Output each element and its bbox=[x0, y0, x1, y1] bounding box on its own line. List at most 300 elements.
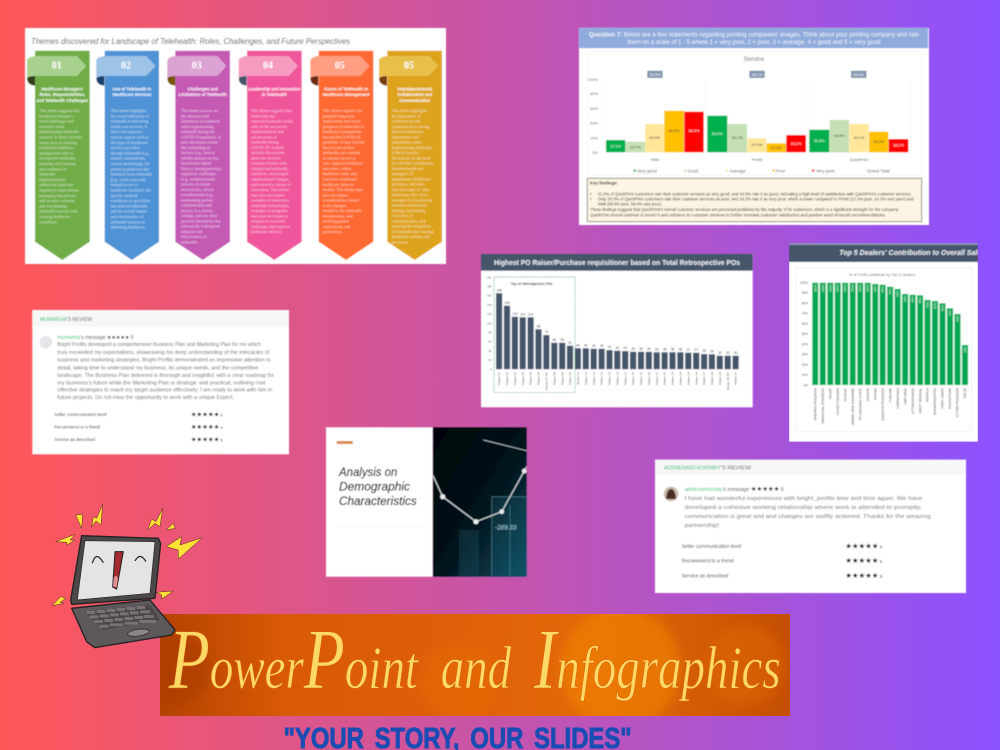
theme column 01: regulatory requirements, bbox=[39, 188, 80, 194]
theme column 04: strategies or programs bbox=[251, 208, 288, 213]
review body: future projects. Do not miss the opportunity to work with a unique Expert. bbox=[57, 395, 234, 401]
bar chart: retrospective POs: 30 bbox=[718, 351, 722, 355]
bar chart: profit share by dealer: 89% bbox=[903, 295, 907, 302]
heading: telehealth themes: Themes discovered for Landscape of Telehealth: Roles, Challenges, and Future Perspectives bbox=[31, 36, 351, 46]
rating rows: Recommend to a friend bbox=[54, 425, 100, 430]
bar chart: retrospective POs: Raiser 27 bbox=[702, 372, 706, 385]
theme column 01: faced challenges and bbox=[39, 119, 73, 124]
key findings box: Key findings: bbox=[590, 180, 618, 186]
bar chart: retrospective POs: 35 bbox=[702, 349, 706, 353]
theme column 05: healthcare delivery bbox=[323, 182, 355, 187]
bar chart: retrospective POs: Raiser 11 bbox=[576, 372, 580, 385]
theme column 02: benefited from telehealth bbox=[111, 172, 152, 177]
theme column 04: championed telehealth bbox=[251, 166, 288, 171]
bar chart: retrospective POs: 42 bbox=[616, 346, 619, 350]
bar chart: profit share by dealer: ANDHRA PRADESH bbox=[814, 388, 818, 420]
theme column 02: delivering healthcare. bbox=[111, 225, 146, 230]
reviewer line with rating: mumweha's message ★★★★★ 5 bbox=[57, 335, 134, 341]
slide title: Demographic bbox=[339, 480, 410, 494]
bar chart: retrospective POs: 115 bbox=[512, 312, 518, 316]
theme column 06: Collaboration and bbox=[397, 92, 433, 97]
theme column 06: stakeholders when bbox=[392, 140, 422, 144]
theme column 06: seamless information bbox=[392, 202, 427, 208]
theme column 02: limited access to bbox=[111, 182, 138, 187]
theme column 02: and effectiveness of bbox=[111, 214, 144, 219]
theme column 05: potential long-term bbox=[323, 113, 355, 118]
bar chart: retrospective POs: Raiser 13 bbox=[592, 372, 596, 385]
theme column 04: telehealth technologies, bbox=[251, 203, 290, 209]
panel: demographic analysis slide bbox=[326, 427, 527, 577]
theme column 05: outcomes, reduce bbox=[323, 166, 352, 172]
key findings box: • bbox=[590, 197, 592, 202]
bar chart: retrospective POs: Raiser 24 bbox=[678, 372, 682, 385]
theme column 01: This theme suggests that bbox=[39, 108, 81, 113]
theme column 01: telehealth services with bbox=[39, 209, 78, 214]
bar chart: service ratings: 100% bbox=[588, 77, 598, 82]
theme column 03: effectiveness of bbox=[181, 234, 207, 239]
theme column 06: strategies for facilitating bbox=[392, 197, 432, 202]
bar chart: retrospective POs: 39 bbox=[647, 347, 651, 351]
theme column 02: various aspects such as bbox=[111, 134, 149, 140]
rating rows: Service as described bbox=[682, 574, 728, 580]
bar chart: retrospective POs: 38 bbox=[671, 348, 674, 352]
bar chart: retrospective POs: Raiser 29 bbox=[718, 372, 722, 385]
theme column 04: about the need for bbox=[251, 155, 281, 160]
bar chart: retrospective POs: 60 bbox=[488, 340, 492, 344]
bar chart: service ratings: Good bbox=[688, 168, 699, 174]
bar chart: retrospective POs: Raiser 22 bbox=[663, 372, 667, 385]
theme column 05: infrastructure, and bbox=[323, 213, 353, 219]
bar chart: service ratings: 40.1% bbox=[732, 136, 743, 140]
theme column 04: organizational changes, bbox=[251, 177, 290, 183]
bar chart: retrospective POs: 120 bbox=[487, 312, 492, 316]
theme column 04: in Telehealth bbox=[262, 92, 287, 97]
theme column 04: COVID-19. It likely bbox=[251, 145, 285, 150]
theme column 05: transform traditional bbox=[323, 177, 357, 182]
bar chart: service ratings: 0% bbox=[592, 150, 598, 155]
bar chart: profit share by dealer: RAJASTHAN bbox=[948, 388, 952, 409]
panel: top dealers chart bbox=[789, 243, 985, 442]
bar chart: profit share by dealer: 100% bbox=[866, 284, 870, 292]
bar chart: retrospective POs: Raiser 08 bbox=[552, 372, 556, 385]
bar chart: profit share by dealer: 82% bbox=[933, 302, 937, 309]
theme column 03: setting), and any other bbox=[181, 213, 218, 219]
bar chart: service ratings: Poor bbox=[776, 168, 786, 174]
theme column 01: issues such as adapting bbox=[39, 140, 77, 145]
theme column 06: Communication bbox=[399, 98, 431, 103]
bar chart: retrospective POs: 140 bbox=[487, 303, 492, 307]
theme column 02: Healthcare Services bbox=[112, 92, 152, 97]
theme column 06: 05 bbox=[404, 60, 414, 72]
bar chart: profit share by dealer: TELANGANA STATE bbox=[858, 387, 862, 421]
review header bbox=[655, 460, 966, 475]
bar chart: retrospective POs: Raiser 18 bbox=[631, 372, 635, 385]
theme column 03 bbox=[167, 51, 230, 260]
panel: telehealth themes bbox=[25, 28, 446, 264]
bar chart: profit share by dealer: 100% bbox=[843, 284, 847, 292]
theme column 04: telehealth during bbox=[251, 140, 279, 145]
bar chart: service ratings bbox=[587, 52, 922, 175]
theme column 02: This theme highlights bbox=[111, 108, 147, 113]
theme column 01: healthcare managers bbox=[39, 113, 73, 118]
bar chart: service ratings: Very poor bbox=[816, 168, 835, 174]
theme column 02: healthcare facilities), the bbox=[111, 188, 151, 194]
theme column 01: existing healthcare bbox=[39, 214, 70, 219]
theme column 06: discussions on the need bbox=[392, 155, 430, 160]
theme column 03: barriers (e.g., lack of bbox=[181, 150, 216, 156]
bar chart: retrospective POs bbox=[487, 275, 739, 390]
theme column 05: 05 bbox=[335, 60, 345, 72]
bar chart: profit share by dealer: 0% bbox=[803, 383, 808, 387]
theme column 03: policies, licensure bbox=[181, 182, 211, 188]
bar chart: retrospective POs: Raiser 12 bbox=[584, 372, 588, 385]
bar chart: retrospective POs: 45 bbox=[592, 344, 596, 348]
theme column 06: between healthcare bbox=[392, 166, 423, 171]
theme column 06: communication, and bbox=[392, 218, 425, 224]
review body: effective strategies to reach my target audience effectively. I am ready to work with him in bbox=[57, 388, 272, 394]
theme column 04: includes discussions bbox=[251, 150, 285, 155]
theme column 03: Limitations of Telehealth bbox=[179, 92, 227, 97]
slide photo: stock chart: -289.33 bbox=[495, 524, 517, 532]
theme column 02: telehealth services in bbox=[111, 219, 145, 224]
theme column 03: COVID-19 pandemic. It bbox=[181, 134, 222, 139]
theme column 02: (e.g., rural areas with bbox=[111, 177, 145, 183]
rating rows: Service as described bbox=[54, 437, 96, 442]
theme column 03: telehealth. bbox=[181, 239, 198, 244]
panel: service survey chart bbox=[579, 28, 929, 225]
laptop touchpad bbox=[127, 628, 150, 637]
bar chart: profit share by dealer: 40% bbox=[802, 342, 808, 346]
theme column 03: This theme focuses on bbox=[181, 108, 218, 113]
banner bokeh lights bbox=[164, 614, 783, 716]
bar chart: profit share by dealer: 69% bbox=[956, 315, 960, 322]
bar chart: profit share by dealer: 80% bbox=[940, 305, 944, 311]
bar chart: profit share by dealer: HIMACHAL PRADESH bbox=[821, 388, 825, 424]
rating rows: ★★★★★ 5 bbox=[845, 541, 883, 550]
bar chart: profit share by dealer: 100% bbox=[800, 281, 808, 285]
theme column 04: and fostered a culture of bbox=[251, 182, 291, 187]
bar chart: profit share by dealer: UTTAR PRADESH bbox=[956, 388, 960, 417]
bar chart: retrospective POs: 0 bbox=[490, 367, 492, 371]
theme column 05: models. This theme may bbox=[323, 187, 364, 192]
review body: truly exceeded my expectations, showcasing his deep understanding of the intricacies of bbox=[57, 350, 270, 356]
bar chart: profit share by dealer: 50% bbox=[802, 332, 808, 336]
panel: adriennehornby review bbox=[655, 460, 966, 593]
avatar bbox=[39, 336, 52, 349]
rating rows: ★★★★★ 5 bbox=[191, 424, 223, 431]
theme column 02: the types of healthcare bbox=[111, 140, 148, 145]
theme column 04: examples of innovative bbox=[251, 198, 289, 203]
survey question header: them on a scale of 1 - 5 where 1 = very poor, 2 = poor, 3 = average, 4 = good and 5 = very good bbox=[628, 39, 881, 46]
bar chart: profit share by dealer: PUNJAB bbox=[888, 387, 892, 402]
bar chart: retrospective POs: 180 bbox=[487, 284, 492, 288]
theme column 05: prospects of telehealth in bbox=[323, 124, 364, 129]
banner: PowerPoint and Infographics bbox=[160, 614, 790, 716]
key findings box: INMI (58.5% poor, 56.0% very poor). bbox=[598, 202, 662, 207]
theme column 05: care, improve healthcare bbox=[323, 161, 363, 167]
theme column 05: considerations related bbox=[323, 198, 359, 203]
bar chart: profit share by dealer: 20% bbox=[802, 363, 808, 367]
theme column 02: patient populations that bbox=[111, 166, 150, 171]
bar chart: retrospective POs: 200 bbox=[487, 275, 492, 279]
theme column 05: discussions on how bbox=[323, 145, 355, 150]
bar chart: retrospective POs: 58 bbox=[553, 338, 556, 342]
theme column 06: of telehealth into existing bbox=[392, 229, 433, 234]
bar chart: retrospective POs: Raiser 10 bbox=[568, 372, 572, 385]
theme column 04 bbox=[239, 51, 302, 260]
theme column 02: the varied utilization of bbox=[111, 113, 150, 118]
bar chart: retrospective POs: Raiser 20 bbox=[647, 372, 651, 385]
key findings box: • bbox=[590, 192, 592, 196]
theme column 03: insufficient digital bbox=[181, 160, 212, 166]
theme column 06 bbox=[379, 51, 442, 260]
bar chart: profit share by dealer: MADHYA PRADESH bbox=[881, 388, 885, 420]
bar chart: profit share by dealer: 30% bbox=[802, 353, 808, 357]
bar chart: retrospective POs: 138 bbox=[504, 301, 510, 305]
theme column 04: healthcare delivery. bbox=[251, 229, 283, 234]
theme column 01: obstacles when bbox=[39, 124, 64, 129]
bar chart: retrospective POs: Raiser 01 bbox=[497, 372, 501, 385]
bar chart: retrospective POs: Raiser 09 bbox=[560, 372, 564, 385]
bar chart: service ratings: 18.2% bbox=[893, 144, 904, 148]
bar chart: retrospective POs: 43 bbox=[608, 345, 611, 349]
theme column 01: incorporate telehealth, bbox=[39, 156, 76, 162]
bar chart: profit share by dealer: CHHATTISGARH bbox=[836, 388, 840, 415]
bar chart: profit share by dealer: 98% bbox=[881, 286, 885, 293]
slide title: Characteristics bbox=[339, 494, 417, 508]
theme column 02: health care services. It bbox=[111, 124, 148, 129]
theme column 06: ensuring the integration bbox=[392, 224, 431, 228]
bar chart: profit share by dealer: ODISHA bbox=[866, 387, 870, 401]
theme column 01: implementation, bbox=[39, 177, 66, 183]
bar chart: profit share by dealer: HARYANA bbox=[903, 387, 907, 405]
panel: highest PO raiser chart bbox=[481, 254, 753, 407]
rating rows bbox=[682, 541, 883, 580]
review body: I have had wonderful experiences with bright_profits time and time again. We have bbox=[685, 496, 922, 502]
laptop lid bbox=[71, 536, 161, 604]
theme column 02: 02 bbox=[121, 60, 131, 72]
bar chart: profit share by dealer: DELHI bbox=[963, 388, 967, 398]
theme column 06: Interdepartmental bbox=[397, 86, 433, 91]
orange accent bar bbox=[337, 441, 353, 444]
rating rows bbox=[54, 411, 223, 444]
bar chart: retrospective POs: 75 bbox=[545, 330, 548, 334]
bar chart: retrospective POs: 160 bbox=[487, 294, 492, 298]
theme column 04: leadership and bbox=[251, 113, 275, 118]
theme column 04: that were developed or bbox=[251, 213, 289, 218]
theme column 06: healthcare systems and bbox=[392, 234, 429, 239]
bar chart: profit share by dealer: GUJRAT bbox=[843, 387, 847, 402]
bar chart: profit share by dealer bbox=[796, 268, 972, 432]
bar chart: retrospective POs: Raiser 28 bbox=[710, 372, 714, 385]
theme column 01: workflows. bbox=[39, 219, 58, 224]
bar chart: service ratings: 31.6% bbox=[814, 139, 825, 143]
theme column 01 bbox=[27, 51, 90, 260]
PO chart header: Highest PO Raiser/Purchase requisitioner based on Total Retrospective POs bbox=[494, 258, 740, 267]
theme column 01: managing data privacy bbox=[39, 193, 78, 198]
bar chart: profit share by dealer: 83% bbox=[926, 301, 930, 308]
theme column 01: management roles to bbox=[39, 150, 73, 155]
bar chart: profit share by dealer: 100% bbox=[821, 284, 825, 292]
survey question header bbox=[579, 28, 928, 48]
theme column 01: Roles, Responsibilities, bbox=[39, 92, 85, 97]
theme column 06: different healthcare bbox=[392, 129, 424, 134]
bar chart: profit share by dealer: 94% bbox=[896, 290, 900, 297]
laptop keyboard bbox=[85, 605, 160, 630]
theme column 03: adoption and bbox=[181, 229, 202, 234]
review body: my business's future while the Marketing Plan is strategic and practical, outlining cost bbox=[57, 380, 266, 386]
bar chart: service ratings: 35.6% bbox=[853, 73, 865, 77]
bar chart: profit share by dealer: 88% bbox=[918, 297, 922, 303]
theme column 05: healthcare costs, and bbox=[323, 171, 357, 177]
survey question header: Question 7: Below are a few statements regarding printing companies' images. Think about your printing company and rate bbox=[589, 31, 920, 38]
key findings box: These findings suggest that QuickPrint's overall customer services are perceived positively by the majority of its customers, which is a significant strength for the company. bbox=[590, 207, 899, 212]
rating rows: ★★★★★ 5 bbox=[845, 571, 883, 580]
bar chart: service ratings: 56.0% bbox=[689, 129, 700, 133]
callout: top 10 retrospective POs: Top 10 Retrospective POs bbox=[511, 282, 552, 286]
bar chart: profit share by dealer: 80% bbox=[802, 302, 808, 306]
icon: excited laptop with sparks bbox=[52, 504, 202, 648]
review body: detail, taking time to understand my business, its unique needs, and the competitive bbox=[57, 365, 258, 371]
slide title bbox=[338, 465, 417, 508]
bar chart: profit share by dealer: MAHARASHTRA bbox=[933, 387, 937, 415]
theme column 03: restrictions), ethical bbox=[181, 187, 214, 193]
rating rows: ★★★★★ 5 bbox=[191, 411, 223, 418]
theme column 04: challenges and improve bbox=[251, 224, 290, 229]
dealers chart header: Top 5 Dealers' Contribution to Overall Sales bbox=[839, 250, 985, 257]
theme column 02: and the overall impact bbox=[111, 209, 148, 214]
theme column 05: to enhance access to bbox=[323, 155, 356, 160]
review body: landscape. The Business Plan delivered is thorough and insightful, with a clear roadmap for bbox=[57, 373, 274, 379]
callout: top 10 retrospective POs bbox=[494, 277, 575, 393]
banner title: PowerPoint and Infographics bbox=[168, 611, 781, 707]
bar chart: service ratings: Very good bbox=[637, 168, 657, 174]
theme column 02: that utilized telehealth, bbox=[111, 203, 148, 209]
bar chart: retrospective POs: Raiser 25 bbox=[686, 372, 690, 385]
theme column 06: sharing, maintaining bbox=[392, 208, 425, 214]
theme column 03: like technological bbox=[181, 145, 211, 150]
bar chart: profit share by dealer: 96% bbox=[888, 288, 892, 295]
bar chart: profit share by dealer: 39% bbox=[963, 346, 967, 353]
theme column 04: innovation. This theme bbox=[251, 187, 289, 192]
bar chart: retrospective POs: 80 bbox=[488, 330, 492, 334]
theme column 03: (e.g., reimbursement bbox=[181, 176, 216, 182]
bar chart: profit share by dealer: ASSAM bbox=[873, 388, 877, 400]
theme column 06: departments and bbox=[392, 134, 419, 139]
bar chart: service ratings: 24.2% bbox=[791, 142, 802, 146]
bar chart: retrospective POs: Raiser 03 bbox=[513, 372, 517, 385]
review header bbox=[32, 310, 289, 327]
theme column 05: telehealth can continue bbox=[323, 150, 361, 155]
theme column 01: traditional healthcare bbox=[39, 145, 74, 150]
theme column 04: implementation and bbox=[251, 129, 284, 134]
bar chart: service ratings: 38.1% bbox=[752, 73, 763, 77]
review body: Bright Profits developed a comprehensive Business Plan and Marketing Plan for me which bbox=[57, 342, 261, 348]
bar chart: retrospective POs: 46 bbox=[576, 344, 580, 348]
rating rows: Seller communication level bbox=[682, 544, 741, 550]
theme column 02: telehealth in delivering bbox=[111, 119, 148, 124]
bar chart: retrospective POs: 114 bbox=[528, 312, 533, 316]
theme column 05: Future of Telehealth in bbox=[324, 86, 368, 91]
review body bbox=[685, 496, 931, 529]
bar chart: service ratings: 50.9% bbox=[712, 132, 723, 136]
bar chart: service ratings: 80% bbox=[590, 91, 598, 96]
theme column 06: It likely includes bbox=[392, 150, 420, 155]
theme column 06: implementing telehealth. bbox=[392, 145, 432, 150]
bar chart: service ratings: 44.8% bbox=[834, 134, 845, 138]
bar chart: service ratings: 12.2% bbox=[771, 146, 782, 150]
slide title: Analysis on bbox=[338, 465, 398, 479]
bar chart: profit share by dealer: 100% bbox=[828, 284, 832, 292]
review body: partnership! bbox=[685, 523, 720, 529]
bar chart: retrospective POs: 20 bbox=[488, 358, 492, 362]
bar chart: retrospective POs: Raiser 16 bbox=[615, 372, 619, 385]
bar chart: retrospective POs: 40 bbox=[623, 346, 627, 350]
bar chart: retrospective POs: 39 bbox=[631, 347, 635, 351]
bar chart: profit share by dealer: BIHAR bbox=[828, 388, 832, 399]
theme column 05: healthcare management bbox=[323, 129, 362, 134]
theme column 01: and Telehealth Challenges bbox=[37, 98, 89, 103]
bar chart: retrospective POs: 88 bbox=[537, 324, 540, 328]
bar chart: service ratings: PrintIt bbox=[752, 157, 763, 162]
bar chart: service ratings: 15.7% bbox=[630, 146, 641, 150]
laptop screen bbox=[77, 541, 155, 600]
bar chart: retrospective POs: Raiser 04 bbox=[521, 372, 525, 385]
review body bbox=[57, 342, 274, 401]
theme column 01: telehealth bbox=[39, 172, 55, 177]
theme column 01: and coordinating bbox=[39, 203, 67, 208]
bar chart: retrospective POs: Raiser 17 bbox=[623, 372, 627, 385]
bar chart: retrospective POs: 30 bbox=[734, 351, 738, 355]
rating rows: Seller communication level bbox=[54, 412, 107, 417]
theme column 02: conditions or specialties bbox=[111, 198, 151, 203]
bar chart: service ratings: 40.0% bbox=[649, 136, 661, 140]
rating rows: Recommend to a friend bbox=[682, 558, 734, 564]
theme column 05: Healthcare Management bbox=[322, 92, 370, 97]
bar chart: retrospective POs: 51 bbox=[568, 341, 572, 345]
PO chart header bbox=[481, 254, 753, 271]
theme column 05: This theme explores the bbox=[323, 108, 362, 113]
bar chart: retrospective POs: 37 bbox=[694, 348, 698, 352]
panel: mumweha review bbox=[32, 310, 289, 454]
theme column 03: literacy among patients), bbox=[181, 166, 222, 172]
theme column 03: affected the widespread bbox=[181, 224, 220, 228]
bar chart: retrospective POs: 39 bbox=[639, 347, 643, 351]
bar chart: profit share by dealer: 88% bbox=[911, 296, 915, 303]
theme column 03: telehealth during the bbox=[181, 129, 215, 134]
theme column 06: theme may also cover bbox=[392, 192, 428, 197]
rating rows: ★★★★★ 5 bbox=[191, 436, 223, 444]
theme column 02: likely encompasses bbox=[111, 129, 143, 134]
bar chart: service ratings: INMI bbox=[651, 157, 659, 162]
bar chart: retrospective POs: Raiser 26 bbox=[694, 372, 698, 385]
avatar bbox=[664, 487, 678, 501]
bar chart: retrospective POs: Raiser 14 bbox=[600, 372, 604, 385]
bar chart: service ratings: 40.1% bbox=[854, 136, 865, 140]
bar chart: profit share by dealer: 10% bbox=[802, 373, 808, 377]
dealers chart header bbox=[789, 243, 985, 262]
bar chart: service ratings: 29.0% bbox=[873, 140, 885, 144]
theme column 04: visionary leaders who bbox=[251, 161, 287, 166]
bar chart: service ratings: 32.8% bbox=[650, 73, 661, 77]
theme column 01: services. It likely includes bbox=[39, 134, 82, 140]
bar chart: retrospective POs: Raiser 05 bbox=[529, 372, 533, 385]
theme column 06: processes. bbox=[392, 239, 408, 244]
theme column 03: maintaining patient bbox=[181, 197, 214, 202]
theme column 06: departments, healthcare bbox=[392, 176, 431, 182]
bar chart: profit share by dealer: 99% bbox=[873, 285, 877, 292]
bar chart: retrospective POs: 114 bbox=[520, 312, 525, 316]
